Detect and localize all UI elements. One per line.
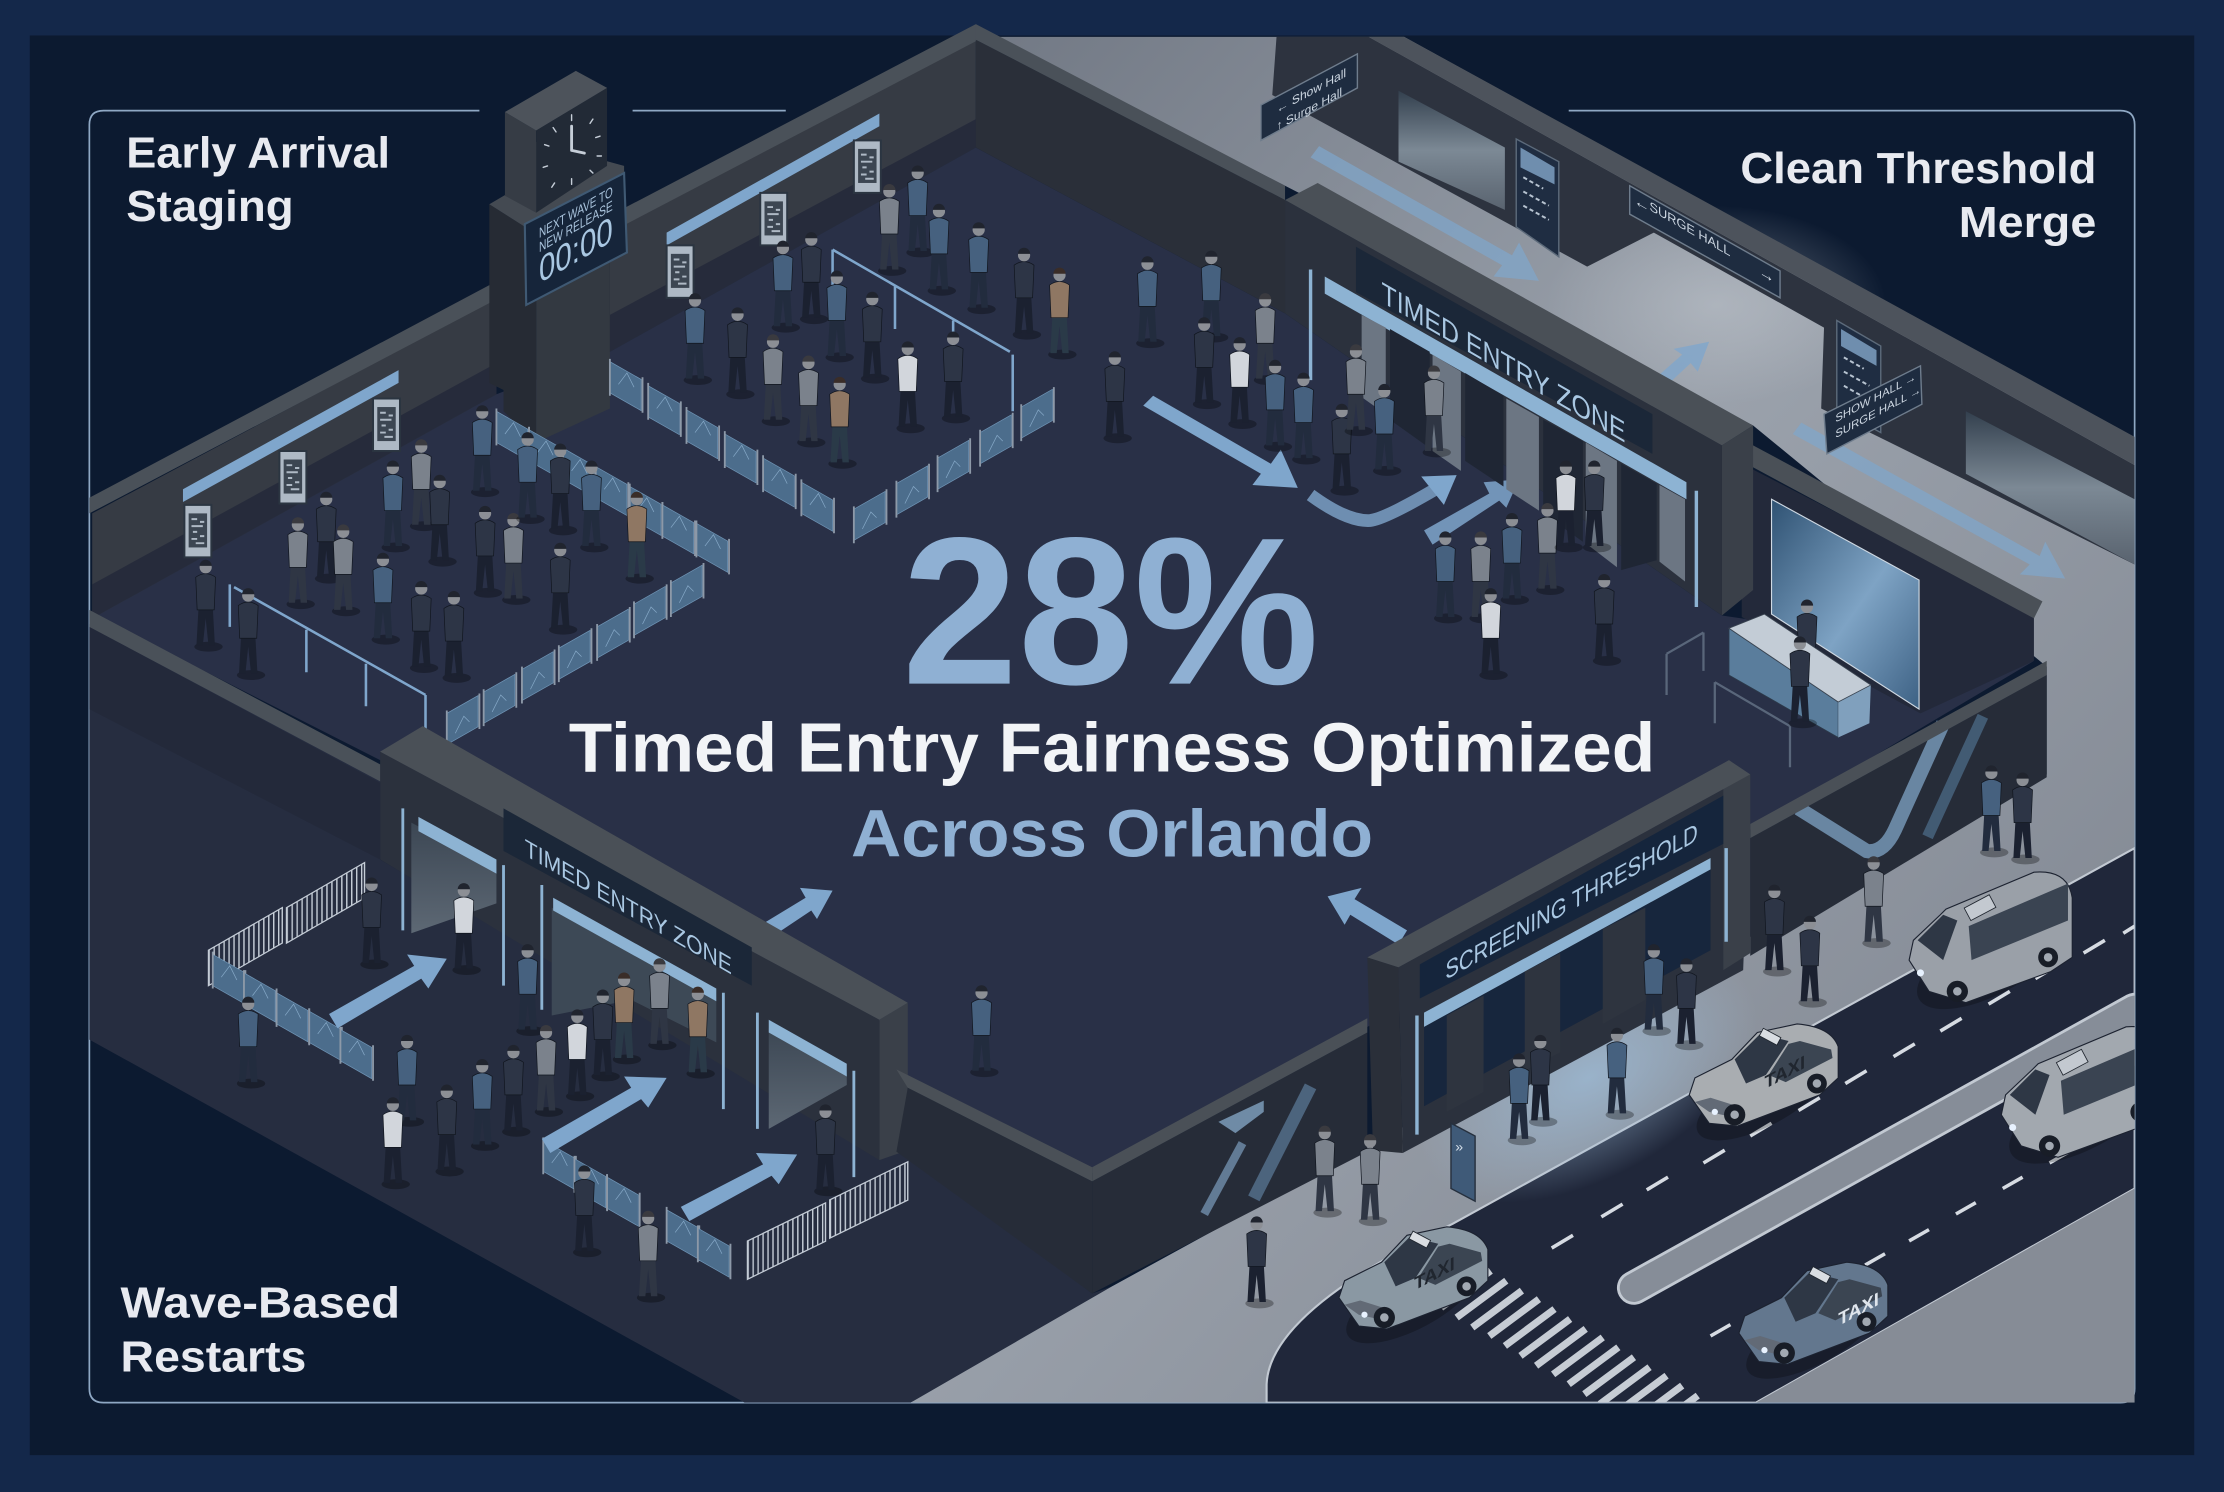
label: early arrival staging: Early Arrival — [126, 128, 390, 177]
reception room wall — [1742, 464, 2034, 713]
left column — [1367, 957, 1403, 1153]
apex wall cap — [976, 24, 1285, 200]
headline title: Timed Entry Fairness Optimized — [569, 709, 1655, 787]
receptionist — [1796, 599, 1824, 691]
upper left wall face — [610, 40, 976, 352]
headline stat: 28% — [902, 495, 1319, 729]
desk top — [1729, 614, 1871, 702]
dark doorway bays — [1390, 329, 1657, 570]
upper right building — [1285, 183, 1753, 616]
blue taxi — [1734, 1262, 1891, 1396]
people: upper staging group — [684, 166, 1077, 469]
road surface — [1267, 848, 2135, 1403]
lower sidewalk — [1756, 1188, 2135, 1403]
threshold building — [1367, 760, 1798, 1254]
rope line left with stanchions — [230, 584, 426, 737]
curved arrow — [1311, 475, 1457, 521]
mural wall right cap — [1750, 661, 2047, 838]
building face — [380, 752, 879, 1160]
sign: screening threshold: SCREENING THRESHOLD — [1445, 817, 1698, 986]
tower right face — [536, 262, 610, 438]
lane markings — [1552, 926, 2135, 1336]
vehicles — [1334, 872, 2172, 1396]
building cap — [1367, 760, 1750, 967]
glass right — [543, 1137, 576, 1191]
light strip — [1325, 277, 1686, 499]
fences and lower glass — [208, 863, 908, 1279]
wayfinding totem — [1451, 1123, 1475, 1201]
doorway recess — [1424, 869, 1711, 1106]
vertical light bars — [403, 808, 854, 1177]
staging front wall cap — [89, 610, 383, 783]
door columns — [1447, 908, 1645, 1112]
building side — [1722, 425, 1753, 616]
overhead sign: surge hall two: SURGE HALL → — [1835, 382, 1921, 441]
countdown display: NEW RELEASE — [539, 198, 613, 256]
upper left wall shadow — [610, 119, 976, 352]
lower left exit arrow — [766, 888, 833, 933]
arrivals: people groups — [194, 166, 2040, 1308]
van two — [1995, 1027, 2172, 1183]
cap mural lower — [1092, 1018, 1367, 1181]
desk side — [1838, 685, 1871, 737]
clock block right face — [536, 88, 607, 213]
corridor light pool — [1608, 215, 1869, 362]
headline subtitle: Across Orlando — [851, 798, 1373, 872]
stanchions near reception — [1667, 633, 1790, 767]
overhead sign: surge hall: SURGE HALL — [1650, 199, 1731, 259]
glass display wall — [1772, 499, 1919, 709]
taxi on curb — [1685, 1024, 1841, 1157]
building cap — [380, 726, 908, 1020]
rope line upper with stanchions — [833, 250, 1013, 411]
desk front — [1729, 628, 1838, 737]
taxi at crossing — [1334, 1227, 1491, 1360]
wall left of threshold — [896, 1088, 1092, 1293]
lower left entry arrows — [329, 954, 797, 1221]
light strip — [1424, 858, 1711, 1027]
right column — [1723, 774, 1750, 970]
label: clean threshold merge: Clean Threshold — [1740, 144, 2096, 193]
hanging sign: show hall: ↑ Surge Hall — [1277, 84, 1342, 133]
arrow into entry — [1143, 396, 1298, 488]
corridor back wall — [1272, 37, 2135, 564]
van one — [1903, 872, 2080, 1029]
QR posters — [184, 140, 881, 557]
door three — [769, 1020, 847, 1129]
glass left — [213, 952, 245, 1006]
people: street sidewalk — [1245, 765, 2040, 1308]
taxi at crossing: TAXI — [1414, 1253, 1455, 1295]
lower left building — [380, 726, 908, 1177]
corridor window one — [1399, 91, 1505, 210]
building face — [1399, 774, 1750, 1153]
label: clean threshold merge: Merge — [1959, 198, 2096, 247]
countdown display — [525, 173, 627, 305]
people: left staging group — [194, 405, 654, 683]
clock tower — [489, 71, 627, 442]
hanging sign: show hall: ← Show Hall — [1277, 65, 1346, 116]
cap left of threshold — [896, 1069, 1092, 1181]
building cap — [1285, 183, 1753, 445]
staging front wall face — [89, 627, 90, 709]
light strip left — [183, 370, 399, 502]
lower left wall shadow — [92, 363, 496, 618]
overhead sign: surge hall two — [1824, 366, 1922, 454]
threshold arrow — [1328, 888, 1407, 945]
light strip upper — [667, 113, 879, 245]
main floor — [89, 147, 2034, 1173]
sidewalk floor arrows — [1143, 396, 1519, 545]
corridor arrow two — [1793, 423, 2065, 579]
overhead sign: surge hall: ← — [1634, 190, 1650, 217]
sign: timed entry zone lower: TIMED ENTRY ZONE — [525, 833, 732, 980]
label: early arrival staging: Staging — [126, 182, 294, 231]
mural wall lower — [1092, 1032, 1367, 1293]
kiosk sign one — [1516, 139, 1559, 257]
reception room cap — [1733, 445, 2042, 618]
apex wall face — [976, 40, 1285, 313]
clock block left face — [505, 112, 536, 213]
sidewalk glow — [1379, 902, 1798, 1254]
upper left wall cap — [610, 24, 979, 233]
building face — [1285, 200, 1722, 616]
door one — [411, 817, 496, 933]
blue taxi: TAXI — [1838, 1289, 1879, 1331]
plaza floor lower left — [89, 624, 1112, 1403]
label: wave-based restarts: Wave-Based — [121, 1279, 400, 1328]
corridor window two — [1966, 411, 2135, 564]
crosswalk — [1441, 1271, 1730, 1451]
corridor arrow one — [1311, 146, 1539, 281]
people: upper entry queue — [1103, 251, 1817, 728]
sign: timed entry zone upper: TIMED ENTRY ZONE — [1381, 275, 1625, 449]
wayfinding totem: » — [1455, 1140, 1463, 1156]
tower left face — [489, 204, 536, 442]
corridor arrow up — [1658, 342, 1709, 383]
glass barriers: left staging — [447, 408, 729, 747]
overhead sign: surge hall two: SHOW HALL → — [1835, 369, 1916, 425]
overhead sign: surge hall: → — [1759, 261, 1774, 288]
mural wall right — [1750, 675, 2047, 956]
clock hands and ticks — [543, 115, 601, 187]
median island — [1634, 1010, 2135, 1288]
vertical light bars — [1311, 269, 1696, 607]
lower left wall face — [92, 298, 496, 618]
metal fence left — [208, 908, 282, 986]
lower left wall cap — [89, 285, 499, 513]
label: wave-based restarts: Restarts — [121, 1332, 306, 1381]
countdown display: 00:00 — [539, 209, 613, 292]
taxi on curb: TAXI — [1764, 1052, 1805, 1094]
overhead sign: surge hall — [1630, 186, 1780, 298]
service corridor floor — [911, 37, 2135, 1403]
sign panel — [1420, 796, 1723, 998]
countdown display: NEXT WAVE TO — [539, 184, 613, 242]
door openings — [1362, 315, 1685, 581]
panel: card outline — [89, 111, 2135, 1403]
arrow to door — [1424, 479, 1519, 545]
clock block top — [505, 71, 607, 130]
building side — [879, 1003, 908, 1160]
metal fence right — [747, 1203, 825, 1279]
vertical light bars — [1417, 848, 1726, 1135]
sign panel — [1356, 247, 1652, 454]
hanging sign: show hall — [1261, 54, 1357, 140]
reception desk — [1729, 599, 1871, 737]
tower shoulder — [489, 142, 624, 234]
door two — [552, 898, 716, 1042]
corridor wall cap — [1369, 37, 2135, 465]
glass barriers: upper staging — [610, 359, 1054, 543]
people: lower entry queue — [237, 877, 999, 1303]
kiosk sign two — [1837, 321, 1881, 433]
